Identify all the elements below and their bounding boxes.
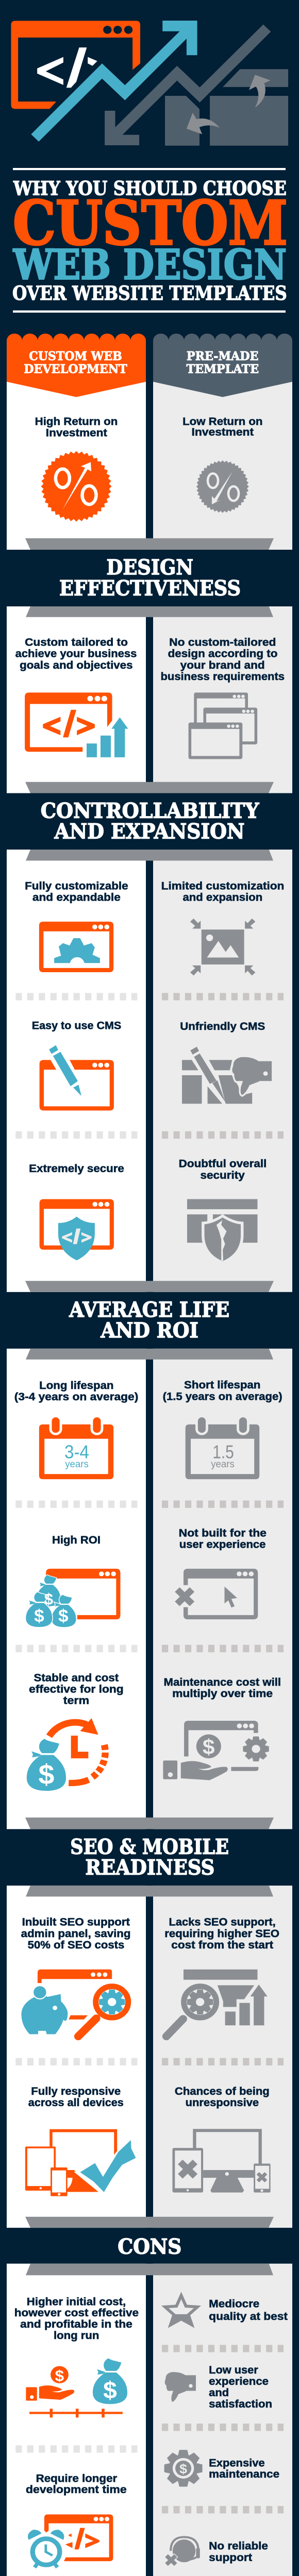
arrow: teal growth arrow bbox=[31, 21, 197, 142]
text: fully responsive: Fully responsive bbox=[31, 2086, 121, 2097]
icon: half filled star bbox=[165, 2296, 197, 2327]
text: stable and cost effective bbox=[29, 1672, 124, 1707]
text: maintenance cost bbox=[164, 1676, 281, 1700]
text: higher initial cost: Higher initial cost, bbox=[27, 2296, 126, 2308]
text: fully responsive: across all devices bbox=[28, 2097, 124, 2109]
text: limited customization bbox=[161, 880, 284, 904]
header: pre-made template bbox=[153, 334, 292, 397]
icon: browser with code and growth bars bbox=[25, 692, 128, 757]
icon: money bag with clock: $ bbox=[38, 1759, 54, 1790]
text: maintenance cost: multiply over time bbox=[172, 1688, 273, 1700]
text: require longer development time: Require longer bbox=[36, 2472, 117, 2484]
text: higher initial cost: long run bbox=[54, 2330, 99, 2342]
icon: stacked template windows bbox=[189, 692, 257, 759]
icon: alarm clock with code window bbox=[28, 2515, 113, 2568]
text: no custom-tailored: No custom-tailored bbox=[169, 637, 276, 648]
heading: seo and mobile readiness: SEO & MOBILE bbox=[70, 1834, 229, 1859]
text: short lifespan bbox=[163, 1379, 283, 1402]
text: limited customization: Limited customization bbox=[161, 880, 284, 892]
text: unfriendly cms: Unfriendly CMS bbox=[180, 1021, 265, 1032]
text: short lifespan: (1.5 years on average) bbox=[163, 1391, 283, 1402]
icon: cracked shield bbox=[187, 1199, 258, 1261]
icon: money bags with browser: $ bbox=[44, 1590, 53, 1608]
icon: hand coin and gear: $ bbox=[203, 1735, 215, 1758]
panel: column headers bbox=[7, 334, 292, 397]
text: inbuilt seo support bbox=[21, 1917, 131, 1951]
text: lacks seo support: cost from the start bbox=[171, 1939, 273, 1951]
text: chances of being unresponsive: Chances of being bbox=[175, 2086, 270, 2097]
text: require longer development time bbox=[26, 2472, 127, 2496]
icon: grey calendar 1.5 years: 1.5 bbox=[212, 1441, 234, 1462]
text: stable and cost effective: term bbox=[63, 1695, 89, 1707]
text: mediocre quality: quality at best bbox=[209, 2311, 288, 2323]
icon: grey calendar 1.5 years bbox=[186, 1416, 259, 1479]
header: custom web development bbox=[7, 334, 146, 397]
icon: hand coin and gear bbox=[163, 1721, 269, 1780]
text: low return on investment bbox=[182, 416, 263, 438]
header: pre-made template: TEMPLATE bbox=[187, 362, 259, 376]
heading: seo and mobile readiness bbox=[70, 1834, 229, 1879]
icon: browser with pen bbox=[40, 1045, 114, 1111]
icon: browser with gear bbox=[39, 922, 113, 972]
text: fully customizable: Fully customizable bbox=[25, 880, 128, 892]
icon: thumbs down bbox=[165, 2372, 196, 2402]
text: low user experience: satisfaction bbox=[209, 2398, 272, 2410]
text: fully customizable bbox=[25, 880, 128, 904]
text: not built for the user experience bbox=[179, 1527, 267, 1551]
text: extremely secure: Extremely secure bbox=[29, 1163, 124, 1175]
icon: magnifier with funnel and chart bbox=[167, 1970, 268, 2037]
text: expensive maintenance bbox=[209, 2457, 279, 2480]
text: chances of being unresponsive: unresponsive bbox=[186, 2097, 259, 2109]
text: limited customization: and expansion bbox=[182, 891, 262, 904]
icon: code symbol bbox=[37, 47, 97, 88]
text: long lifespan bbox=[14, 1380, 138, 1403]
text: low user experience: experience bbox=[209, 2376, 269, 2387]
text: inbuilt seo support: admin panel, saving bbox=[21, 1928, 131, 1940]
icon: money bags with browser: $ bbox=[34, 1607, 44, 1626]
panel: column backgrounds, pre-made template bbox=[153, 376, 293, 2576]
text: low user experience bbox=[209, 2364, 272, 2410]
text: expensive maintenance: Expensive bbox=[209, 2457, 265, 2469]
text: no reliable support bbox=[209, 2540, 268, 2564]
text: long lifespan: Long lifespan bbox=[39, 1380, 113, 1392]
heading: cons: CONS bbox=[118, 2234, 181, 2259]
text: lacks seo support: Lacks SEO support, bbox=[169, 1917, 276, 1928]
icon: broken cms with thumbs down bbox=[182, 1047, 272, 1104]
text: low return on investment: Low Return on bbox=[182, 416, 263, 428]
icon: money bags with browser bbox=[26, 1569, 120, 1627]
text: easy to use cms: Easy to use CMS bbox=[32, 1020, 121, 1031]
icon: orange browser window bbox=[11, 21, 140, 109]
text: fully customizable: and expandable bbox=[32, 891, 121, 904]
text: no custom-tailored: design according to bbox=[168, 648, 277, 660]
icon: grey calendar 1.5 years: years bbox=[211, 1459, 235, 1470]
icon: shrinking image bbox=[190, 919, 255, 975]
icon: curved template arrows bbox=[187, 75, 271, 134]
text: maintenance cost: Maintenance cost will bbox=[164, 1676, 281, 1688]
icon: grey template blocks bbox=[165, 69, 288, 146]
header: custom web development: CUSTOM WEB bbox=[29, 349, 122, 363]
heading: average life and roi bbox=[69, 1297, 229, 1343]
icon: hand coin to money bag timeline: $ bbox=[55, 2367, 64, 2385]
text: long lifespan: (3-4 years on average) bbox=[14, 1391, 138, 1403]
icon: piggy bank with magnifier bbox=[21, 1970, 128, 2037]
icon: orange calendar 3-4 years: 3-4 bbox=[64, 1441, 89, 1462]
heading: design effectiveness bbox=[59, 555, 241, 601]
icon: responsive devices with check bbox=[25, 2129, 136, 2196]
text: no reliable support: No reliable bbox=[209, 2540, 268, 2552]
heading: average life and roi: AVERAGE LIFE bbox=[69, 1297, 229, 1322]
text: high return on investment: High Return on bbox=[35, 416, 118, 428]
text: inbuilt seo support: 50% of SEO costs bbox=[28, 1939, 124, 1951]
arrow: grey decline arrow bbox=[105, 24, 271, 145]
text: no custom-tailored bbox=[161, 637, 285, 683]
text: custom tailored: Custom tailored to bbox=[25, 637, 128, 648]
icon: gear with dollar bbox=[164, 2450, 203, 2487]
icon: hand coin to money bag timeline bbox=[26, 2358, 127, 2417]
heading: controllability and expansion bbox=[41, 799, 259, 844]
text: require longer development time: development time bbox=[26, 2484, 127, 2496]
text: no custom-tailored: your brand and bbox=[180, 659, 265, 671]
icon: orange calendar 3-4 years: years bbox=[65, 1459, 89, 1470]
text: low user experience: and bbox=[209, 2387, 229, 2399]
text: high return on investment: Investment bbox=[46, 427, 107, 439]
icon: support headset with x bbox=[162, 2537, 200, 2569]
title block bbox=[12, 168, 288, 313]
text: fully responsive bbox=[28, 2086, 124, 2109]
text: low user experience: Low user bbox=[209, 2364, 258, 2376]
text: lacks seo support: requiring higher SEO bbox=[164, 1928, 279, 1940]
text: doubtful overall security: Doubtful overall bbox=[179, 1158, 267, 1170]
heading: design effectiveness: DESIGN bbox=[106, 555, 193, 580]
icon: browser with x and cursor bbox=[170, 1569, 258, 1619]
text: higher initial cost: however cost effective bbox=[14, 2307, 139, 2319]
text: stable and cost effective: Stable and cost bbox=[34, 1672, 119, 1684]
icon: browser with shield bbox=[40, 1199, 114, 1260]
icon: grey percent badge bbox=[196, 461, 249, 513]
icon: gear with dollar: $ bbox=[179, 2461, 187, 2477]
icon: hand coin to money bag timeline: $ bbox=[103, 2377, 117, 2404]
text: low return on investment: Investment bbox=[192, 427, 254, 438]
heading: controllability and expansion: AND EXPANSION bbox=[54, 819, 244, 844]
text: chances of being unresponsive bbox=[175, 2086, 270, 2109]
header: pre-made template: PRE-MADE bbox=[187, 349, 258, 363]
text: custom tailored: achieve your business bbox=[15, 648, 137, 660]
icon: money bags with browser: $ bbox=[58, 1607, 69, 1626]
icon: orange calendar 3-4 years bbox=[39, 1416, 113, 1479]
text: not built for the user experience: Not built for the bbox=[179, 1527, 267, 1539]
hero illustration: browser with code and growth arrows bbox=[11, 21, 288, 146]
heading: controllability and expansion: CONTROLLABILITY bbox=[41, 799, 259, 823]
text: doubtful overall security: security bbox=[200, 1170, 245, 1181]
text: high roi: High ROI bbox=[52, 1534, 101, 1546]
text: inbuilt seo support: Inbuilt SEO support bbox=[22, 1917, 130, 1928]
header: custom web development: DEVELOPMENT bbox=[24, 362, 127, 376]
heading: seo and mobile readiness: READINESS bbox=[85, 1855, 214, 1879]
text: higher initial cost: and profitable in the bbox=[20, 2318, 132, 2330]
heading: design effectiveness: EFFECTIVENESS bbox=[59, 576, 241, 601]
text: custom tailored bbox=[15, 637, 137, 671]
text: lacks seo support bbox=[164, 1917, 279, 1951]
heading: average life and roi: AND ROI bbox=[100, 1318, 198, 1343]
text: stable and cost effective: effective for long bbox=[29, 1684, 124, 1695]
text: higher initial cost bbox=[14, 2296, 139, 2342]
text: no reliable support: support bbox=[209, 2552, 252, 2564]
text: mediocre quality: Mediocre bbox=[209, 2298, 259, 2310]
text: doubtful overall security bbox=[179, 1158, 267, 1181]
icon: money bag with clock bbox=[27, 1718, 105, 1791]
text: expensive maintenance: maintenance bbox=[209, 2468, 279, 2480]
text: mediocre quality bbox=[209, 2298, 288, 2323]
text: not built for the user experience: user experience bbox=[179, 1539, 265, 1551]
text: custom tailored: goals and objectives bbox=[20, 659, 132, 671]
ribbon trapezoids around section headings bbox=[25, 538, 274, 2576]
icon: orange percent badge bbox=[41, 451, 111, 521]
text: short lifespan: Short lifespan bbox=[184, 1379, 260, 1391]
text: high return on investment bbox=[35, 416, 118, 439]
icon: unresponsive devices bbox=[172, 2130, 271, 2193]
panel: column backgrounds, custom web development bbox=[7, 376, 187, 2576]
text: no custom-tailored: business requirements bbox=[161, 671, 285, 683]
